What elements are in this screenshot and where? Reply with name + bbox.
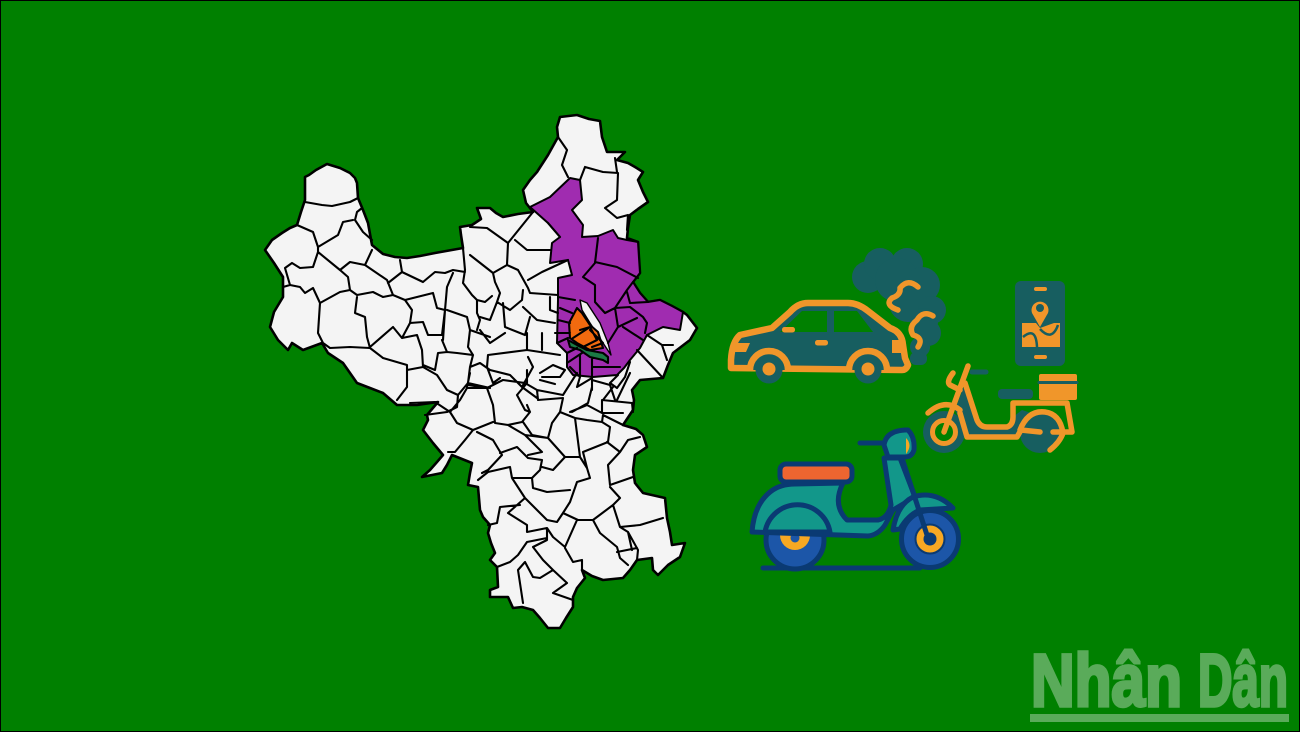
rear wheel — [766, 511, 824, 569]
rear fender — [765, 505, 830, 532]
icon: delivery scooter — [923, 366, 1077, 453]
river band — [580, 300, 611, 355]
front wheel — [902, 510, 958, 568]
delivery box — [1039, 374, 1077, 400]
watermark: Nhân Dân: Nhân — [1031, 639, 1182, 722]
orange core district — [569, 308, 603, 350]
scooter seat — [780, 464, 852, 482]
delivery wheels — [923, 411, 965, 453]
map of Hanoi communes — [265, 115, 697, 628]
scooter body — [752, 458, 915, 536]
delivery seat and handle — [998, 389, 1033, 399]
icon: car with exhaust smoke — [731, 248, 946, 384]
steering column — [860, 443, 927, 535]
icon: phone with map pin — [1015, 281, 1065, 366]
smoke curls — [889, 283, 933, 347]
delivery body fill — [955, 383, 1034, 437]
scooter headlight — [884, 430, 914, 457]
commune boundaries — [283, 137, 673, 603]
car windows — [780, 311, 873, 332]
purple districts — [530, 178, 683, 377]
icon: teal scooter — [752, 430, 958, 569]
ground line — [763, 566, 920, 570]
car details — [735, 327, 902, 353]
smoke cloud — [852, 248, 946, 365]
front fender — [893, 495, 953, 530]
map outline: white land — [265, 115, 697, 628]
car body — [731, 303, 908, 370]
car wheels — [750, 351, 887, 384]
green district — [568, 340, 608, 363]
delivery frame — [928, 366, 1072, 450]
